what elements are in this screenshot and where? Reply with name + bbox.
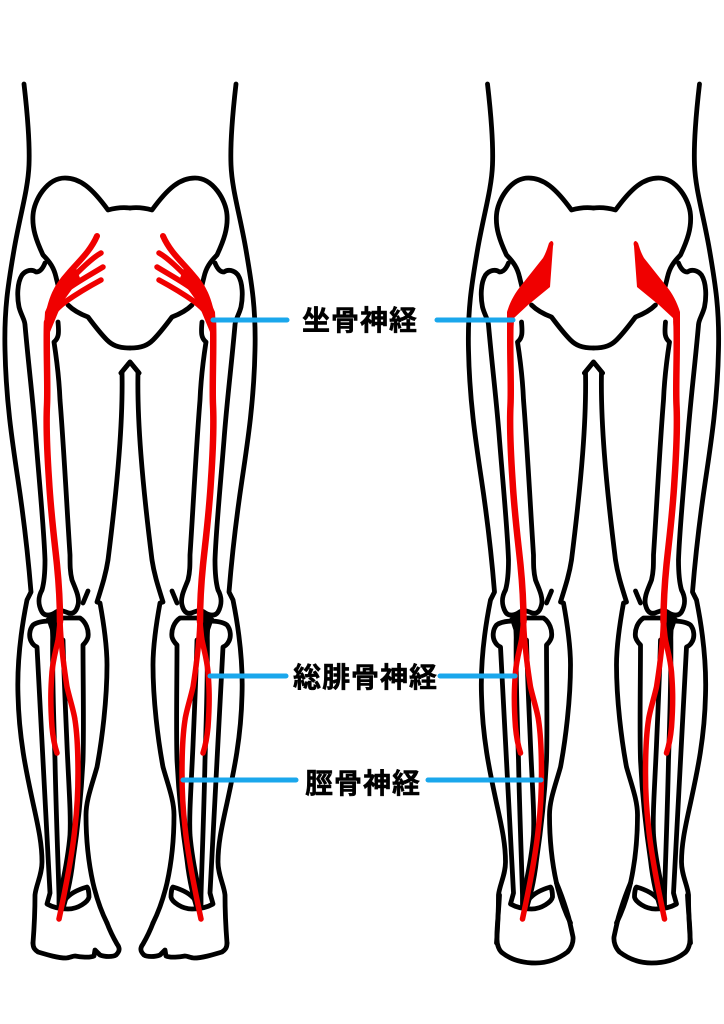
right figure: left foot (497, 883, 573, 963)
left figure: left foot (33, 923, 119, 958)
right figure: sciatic nerve, right leg (634, 241, 680, 919)
leader lines: tibial nerve (183, 778, 541, 782)
leader lines: sciatic nerve (213, 318, 513, 322)
leader lines: common peroneal nerve (210, 674, 515, 678)
right figure: right leg bones and contour (584, 84, 719, 943)
left figure: right foot (141, 923, 227, 958)
left figure: sciatic nerve, right leg (157, 236, 216, 919)
label: tibial nerve: 脛骨神経 (305, 768, 421, 799)
label: common peroneal nerve: 総腓骨神経 (293, 662, 438, 693)
right figure: left leg bones and contour (468, 84, 602, 943)
left figure: sciatic nerve, left leg (44, 236, 103, 919)
left figure: right leg bones and contour (121, 84, 255, 943)
left figure: left leg bones and contour (5, 84, 139, 943)
label: sciatic nerve: 坐骨神経 (302, 305, 418, 336)
right figure: right foot (614, 883, 690, 963)
right figure: sciatic nerve, left leg (507, 241, 553, 919)
right figure: outlined legs and pelvis (468, 84, 719, 963)
left figure: outlined legs and pelvis (5, 84, 255, 958)
